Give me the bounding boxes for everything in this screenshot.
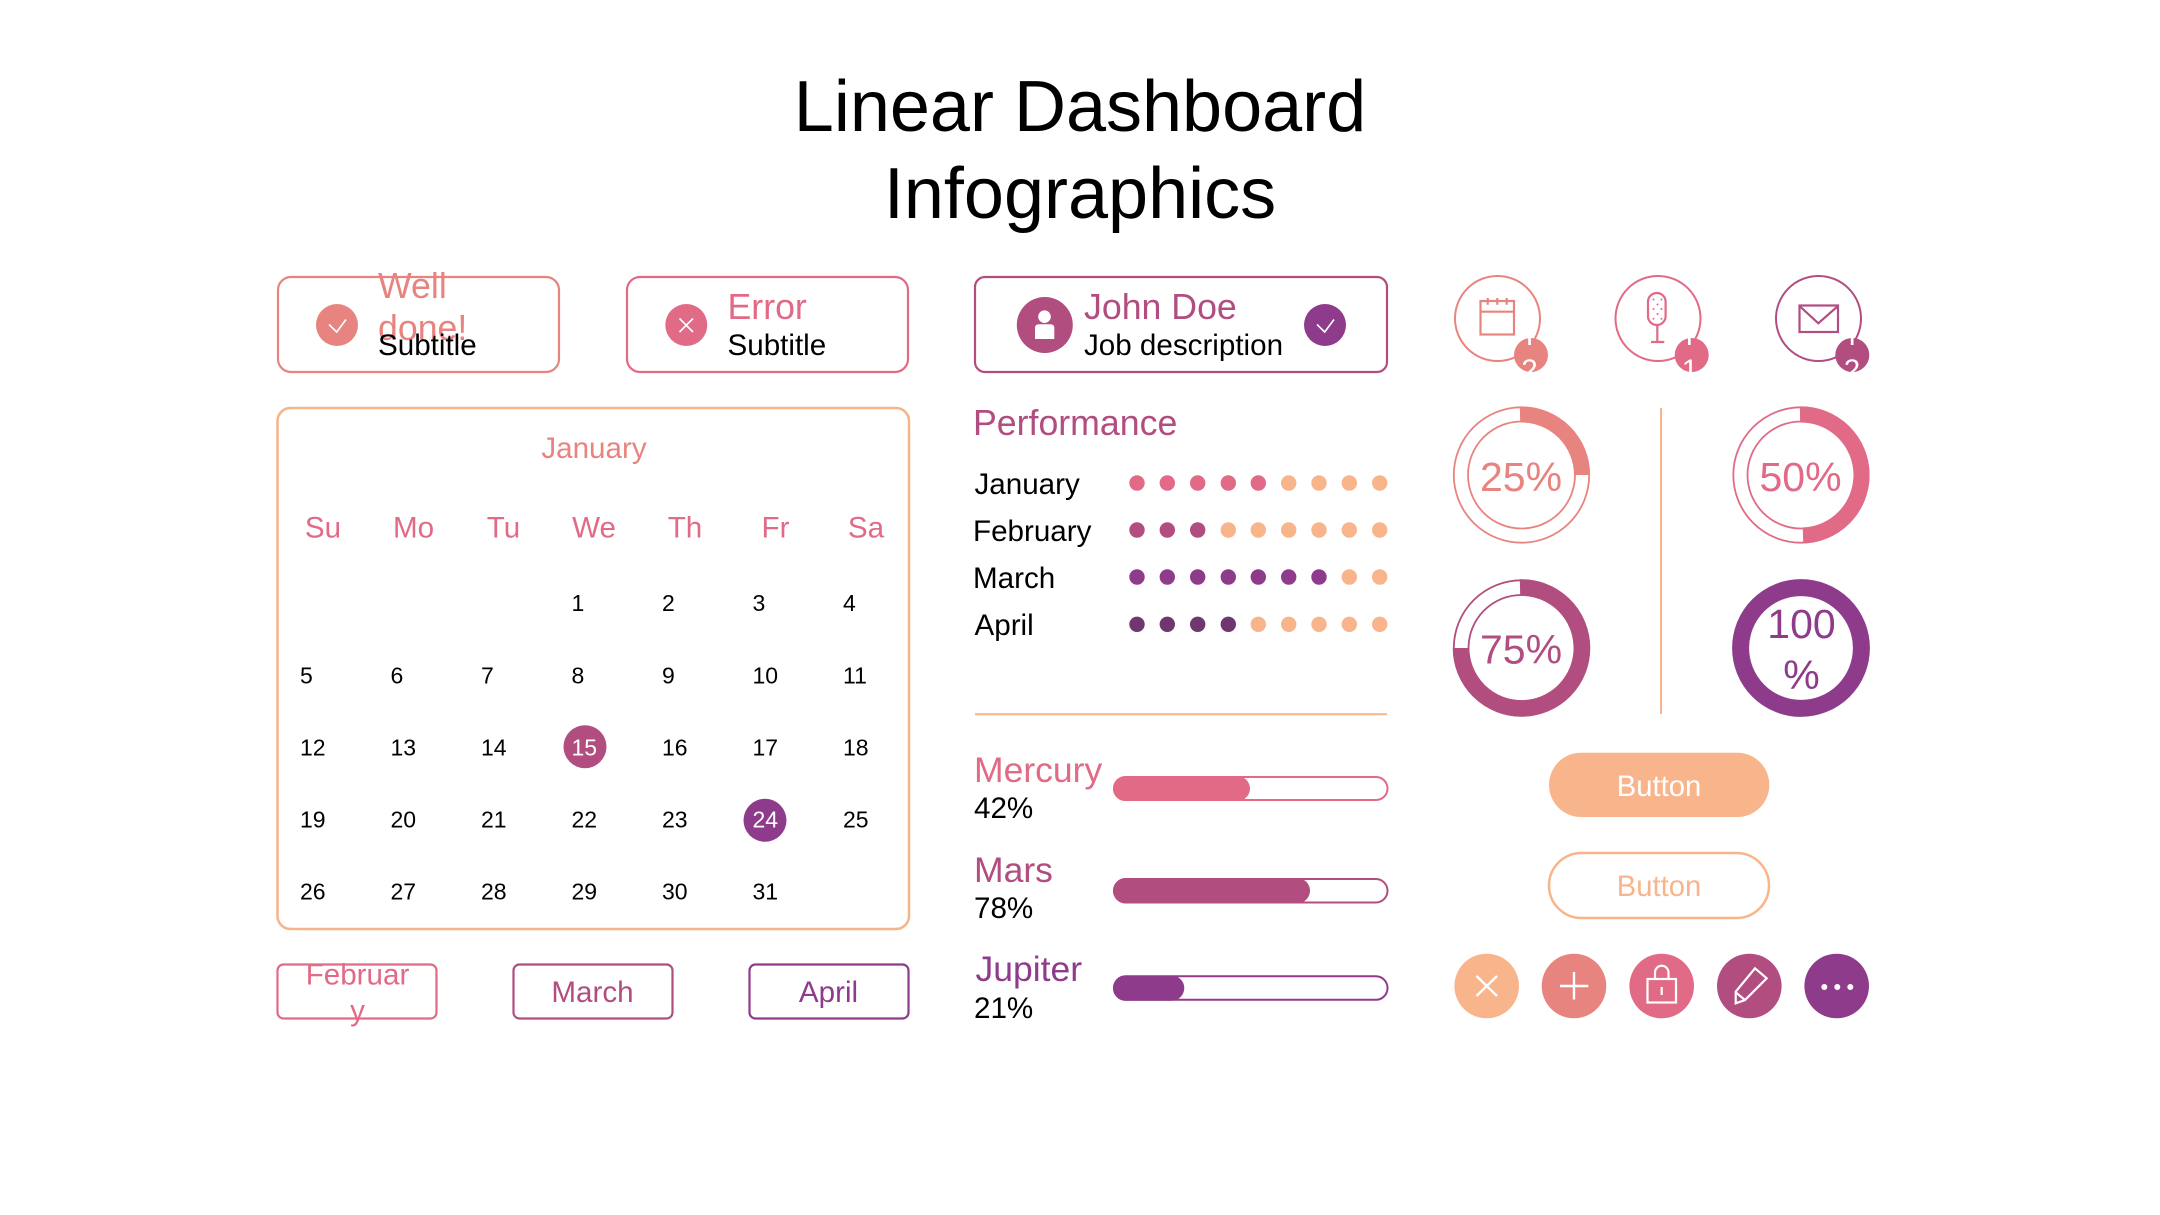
highlight: day 15 marker [564,725,606,768]
calendar dates: 18 [843,734,869,760]
calendar dates: 3 [752,590,765,616]
calendar dates: 29 [572,878,597,904]
performance heading: Performance [973,403,1177,443]
donut chart: 50% [1733,407,1869,543]
title: Infographics [884,154,1276,234]
panel: performance [973,403,1387,642]
filled button [1549,753,1769,817]
donut chart: 25% [1454,407,1589,543]
performance row: April: April [974,609,1034,642]
icon: error badge [665,304,707,346]
calendar dates: 10 [752,662,778,688]
calendar dates: 8 [572,662,584,688]
title: Linear Dashboard [794,67,1366,147]
icon: microphone notification [1616,276,1709,387]
calendar dates: 28 [481,878,507,904]
calendar dates: 31 [752,878,778,904]
calendar dates: 13 [390,734,416,760]
outlined button [1549,853,1769,918]
performance row: January [974,468,1387,501]
calendar dates: 2 [662,590,675,616]
icon button: more [1804,954,1869,1018]
icon: calendar notification: 2 [1521,354,1538,387]
icon: mail notification: 2 [1844,354,1860,387]
donut chart: 75% [1454,580,1589,716]
calendar dates: 14 [481,734,507,760]
month button: February: y [350,994,365,1028]
donut chart: 100%: % [1783,652,1820,698]
performance row: February: February [973,515,1092,548]
calendar dates: 12 [300,734,326,760]
calendar dates [300,590,869,904]
highlight: day 24 marker [744,799,786,842]
performance row: March: March [973,562,1055,595]
panel: calendar [278,408,909,929]
weekday labels [305,512,885,544]
progress bar: Jupiter: Jupiter [976,949,1082,989]
progress bar: Mercury: Mercury [974,750,1102,790]
progress bar: Mars: 78% [974,892,1033,925]
icon button: lock [1629,954,1694,1018]
calendar dates: 9 [662,662,675,688]
calendar dates: 23 [662,806,688,832]
calendar month heading: January [541,432,647,465]
performance row: April [974,609,1387,642]
month button: March [514,964,672,1018]
calendar dates: 17 [752,734,778,760]
progress bar: Mars: Mars [974,850,1053,890]
month button: February: Februar [306,958,409,992]
month button: March: March [551,976,634,1009]
success heading [378,266,467,348]
icon: mail notification [1776,276,1869,387]
icon: user avatar [1017,297,1073,353]
donut chart: 75%: 75% [1480,626,1562,672]
job description: Job description [1084,329,1283,362]
success heading: done! [378,308,467,348]
calendar dates: 6 [390,662,403,688]
calendar dates: 25 [843,806,869,832]
donut chart: 100% [1741,588,1861,708]
month button: April: April [799,976,858,1009]
weekday labels: Tu [487,512,520,544]
panel: user profile card [975,277,1387,372]
outlined button: Button [1617,871,1701,903]
panel: success alert card [278,266,559,372]
icon: calendar notification [1455,276,1548,387]
icon: microphone notification: 1 [1682,354,1698,387]
calendar dates: 21 [481,806,507,832]
calendar dates: 16 [662,734,688,760]
calendar dates: 26 [300,878,326,904]
calendar dates: 5 [300,662,313,688]
progress bar: Mars [974,850,1388,925]
weekday labels: We [572,512,616,544]
progress bar: Jupiter [974,949,1388,1025]
calendar dates: 20 [390,806,416,832]
calendar dates: 30 [662,878,688,904]
donut chart: 25%: 25% [1480,454,1562,500]
calendar dates: 22 [572,806,597,832]
calendar dates: 24 [752,806,778,832]
performance row: March [973,562,1387,595]
calendar dates: 19 [300,806,326,832]
weekday labels: Mo [393,512,434,544]
progress bar: Jupiter: 21% [974,992,1033,1025]
month button: February [278,958,436,1028]
weekday labels: Fr [762,512,790,544]
icon button: close [1454,954,1519,1018]
weekday labels: Su [305,512,341,544]
calendar dates: 15 [572,734,597,760]
icon button: edit [1717,954,1782,1018]
calendar dates: 11 [843,662,867,688]
donut chart: 100%: 100 [1767,601,1836,647]
icon button: add [1542,954,1606,1018]
calendar dates: 1 [572,590,584,616]
error heading: Error [728,287,807,327]
donut chart: 50%: 50% [1759,454,1842,500]
success subtitle: Subtitle [378,329,477,362]
weekday labels: Sa [848,512,885,544]
icon: verified check [1304,304,1346,346]
month button: April [750,964,908,1018]
user name: John Doe [1084,287,1237,327]
performance row: February [973,515,1387,548]
weekday labels: Th [668,512,702,544]
progress bar: Mercury [974,750,1388,825]
progress bar: Mercury: 42% [974,792,1033,825]
calendar dates: 27 [390,878,416,904]
performance row: January: January [974,468,1080,501]
icon: check badge [316,304,358,346]
panel: error alert card [627,277,908,372]
filled button: Button [1617,771,1701,803]
success heading: Well [378,266,447,306]
calendar dates: 4 [843,590,856,616]
error subtitle: Subtitle [728,329,826,362]
calendar dates: 7 [481,662,494,688]
title [794,67,1366,234]
